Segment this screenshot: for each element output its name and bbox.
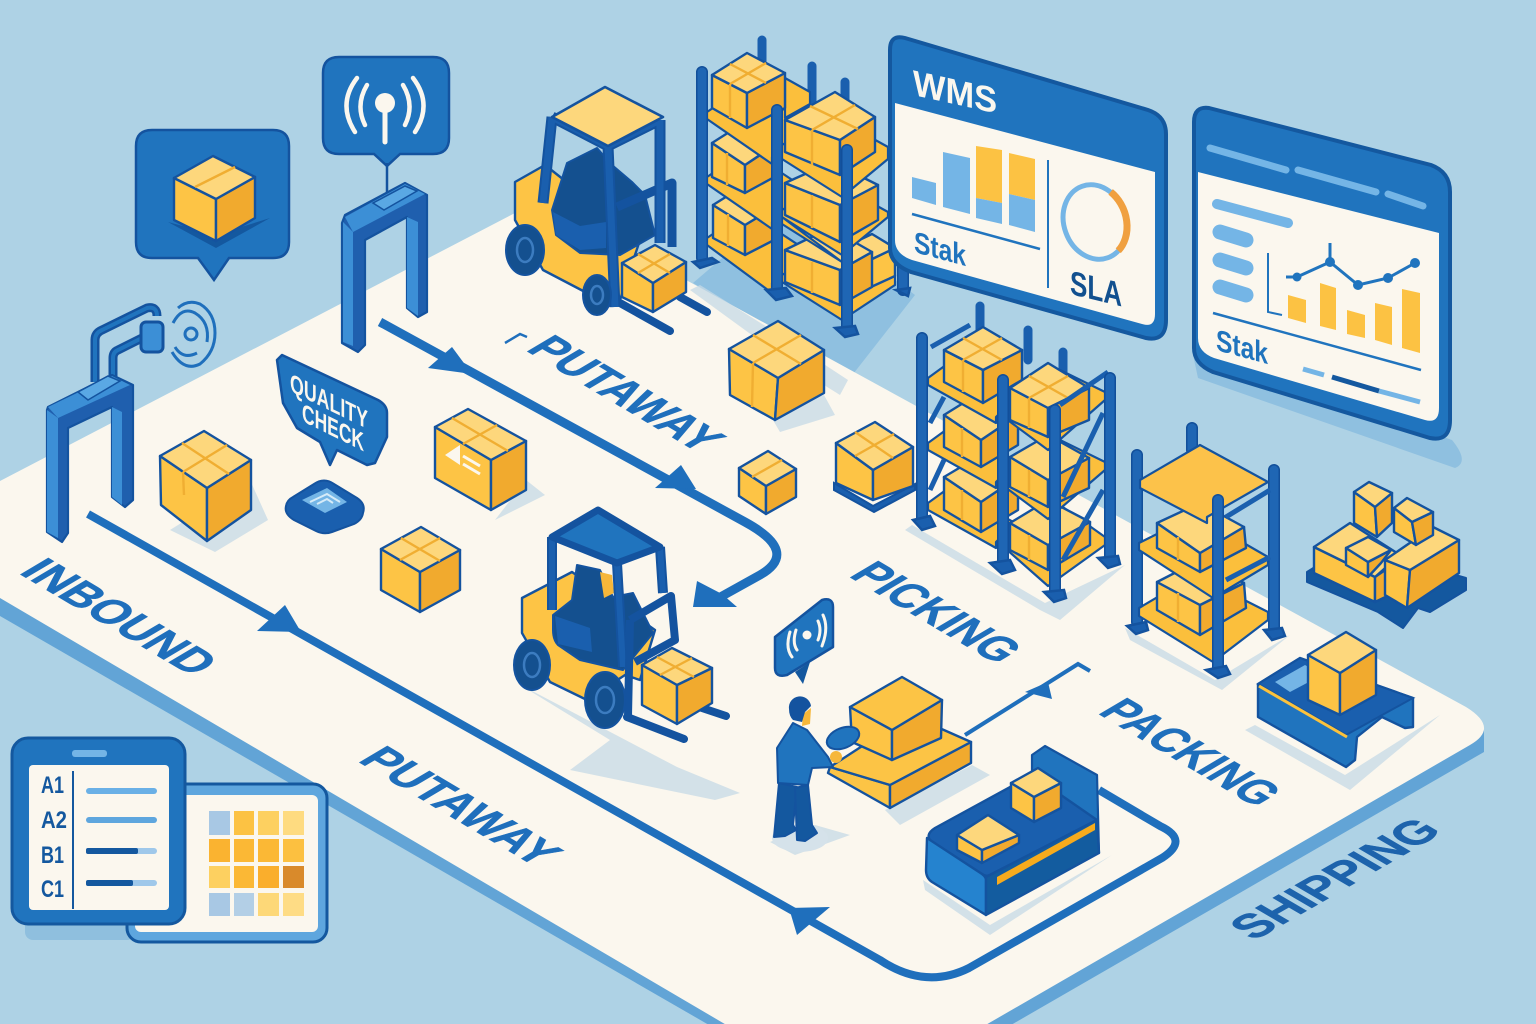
rack B back brace: [930, 325, 970, 490]
rack B mid-left shelf: [928, 427, 1015, 488]
conveyor box 1: [957, 815, 1019, 863]
box rack A4: [785, 92, 875, 175]
route: packing connector: [965, 664, 1090, 735]
stacked parcel: [828, 677, 971, 808]
box: inbound: [160, 431, 251, 541]
Stak label 2: Stak: [1216, 323, 1269, 371]
location label A2: A2: [41, 807, 67, 834]
rack A top-left shelf: [707, 85, 815, 164]
label: PUTAWAY lower: PUTAWAY: [348, 739, 574, 873]
rack shadow on backdrop: [693, 200, 915, 378]
rack A mid-left shelf: [707, 150, 815, 229]
rack B braces: [1060, 372, 1108, 560]
forklift: yellow: [506, 87, 707, 331]
forklift: blue: [514, 510, 726, 739]
gate: RFID arch back: [342, 183, 427, 352]
yellow forklift seat: [552, 148, 655, 255]
box rack B3: [944, 392, 1018, 467]
location label C1: C1: [41, 876, 64, 903]
rack C: [1127, 428, 1285, 678]
conveyor stripe: [997, 823, 1095, 885]
blue forklift body: [522, 572, 655, 700]
pallet stack: [1307, 482, 1466, 628]
rack B top-left shelf: [928, 362, 1015, 423]
scanner: [823, 722, 863, 754]
SLA donut: [1053, 176, 1137, 268]
rack B mid-right shelf: [1005, 440, 1105, 519]
rack C low shelf: [1139, 575, 1268, 662]
quality text: QUALITY: [290, 367, 368, 435]
blue forklift seat: [553, 565, 653, 670]
WMS dashboard: [890, 37, 1166, 339]
callout: RFID signal: [323, 57, 449, 192]
blue forklift load: [642, 648, 712, 724]
route: putaway path: [380, 322, 777, 600]
WMS bars: [912, 146, 1035, 232]
analytics bars: [1288, 283, 1420, 353]
box: labelled arrow: [435, 409, 526, 510]
yellow forklift load: [622, 245, 686, 312]
rack B top-right shelf: [1005, 370, 1105, 450]
hand: [830, 751, 842, 763]
yellow forklift body: [515, 165, 640, 300]
SLA label: SLA: [1070, 264, 1122, 314]
rack C front post: [1127, 500, 1285, 678]
rack C braces: [1226, 490, 1270, 580]
callout: picker scan: [775, 599, 833, 684]
box rack B5: [1010, 435, 1089, 507]
yellow forklift rear wheel: [506, 225, 544, 275]
blue forklift front wheel: [585, 672, 625, 728]
route: inbound to shipping path: [88, 514, 1176, 977]
box rack A1: [712, 53, 785, 128]
box rack A5: [785, 162, 878, 242]
yellow forklift cage: [543, 117, 660, 307]
scanner pad: [286, 480, 364, 533]
worker right leg: [795, 785, 817, 841]
arrow: inbound flow: [257, 605, 301, 632]
label: PACKING: PACKING: [1088, 691, 1294, 813]
arrow: packing connector: [1025, 682, 1052, 699]
heatmap grid: [209, 811, 304, 916]
rack A front posts: [693, 72, 910, 337]
check text: CHECK: [302, 397, 364, 457]
rack B back posts: [980, 306, 1063, 372]
blue forklift hand area: [600, 572, 614, 598]
blue forklift seat cushion: [555, 616, 592, 652]
stack large right box: [1385, 527, 1459, 608]
pallet: [1307, 545, 1466, 628]
box rack A7: [853, 234, 895, 287]
inventory heatmap panel: [25, 784, 327, 942]
arrow: shipping flow: [789, 907, 830, 935]
dashboard shadow: [1192, 350, 1462, 468]
rack B low-left shelf: [928, 487, 1015, 548]
box rack B6: [1010, 500, 1090, 570]
box: large: [729, 321, 824, 420]
rack A mid-right shelf: [782, 180, 888, 262]
rack A: [693, 40, 910, 337]
worker left leg: [774, 783, 797, 837]
icon: scan waves: [172, 302, 215, 366]
label: PUTAWAY upper: PUTAWAY: [516, 328, 737, 459]
floor edge band: [0, 598, 1484, 1024]
box rack C upper: [1157, 503, 1246, 572]
Stak label: Stak: [914, 225, 967, 273]
box rack A2: [712, 122, 778, 193]
dock platform: [1258, 632, 1413, 767]
side pills short: [1220, 232, 1246, 295]
blue forklift cage: [552, 537, 663, 667]
warehouse floor: [0, 200, 1484, 1024]
blue forklift roof: [552, 510, 660, 563]
rack A upper shelf far: [785, 78, 810, 118]
worker: [772, 696, 863, 852]
box rack C lower: [1157, 560, 1246, 635]
box: small: [739, 451, 796, 514]
yellow forklift front wheel: [583, 275, 611, 315]
rack C back posts: [1137, 428, 1274, 628]
analytics dashboard: [1194, 108, 1450, 439]
arrow: putaway flow 2: [655, 465, 696, 489]
parcel top box: [850, 677, 942, 760]
box rack B1: [944, 327, 1022, 403]
side pills: [1217, 204, 1288, 223]
rack B low-right shelf: [1005, 505, 1105, 586]
conveyor: [926, 746, 1099, 915]
rack A lower-right shelf: [782, 245, 895, 320]
yellow forklift roof: [552, 87, 663, 146]
yellow forklift seat cushion: [553, 212, 606, 250]
dock box: [1308, 632, 1376, 715]
box: floor: [381, 527, 460, 612]
worker head: [789, 696, 811, 722]
box rack A3: [713, 185, 778, 255]
blue forklift rear wheel: [514, 640, 550, 690]
stack tall box: [1354, 482, 1392, 537]
worker face: [802, 708, 811, 726]
location label B1: B1: [41, 842, 64, 869]
stack large left box: [1314, 523, 1400, 602]
box rack B2: [1010, 363, 1089, 437]
callout: quality check: [277, 355, 387, 465]
arrow: putaway flow 1: [428, 347, 472, 374]
rack A back posts: [762, 40, 845, 110]
rack C mid shelf: [1139, 515, 1268, 598]
rack C top shelf: [1140, 445, 1268, 523]
analytics line: [1286, 243, 1420, 290]
location bars: [86, 788, 157, 886]
floor shadows: [170, 285, 1440, 935]
stack front small box: [1346, 537, 1391, 577]
location tablet: [12, 738, 185, 924]
header pills: [1210, 148, 1423, 206]
rack A lower-left shelf: [707, 211, 815, 293]
putaway tick: [505, 334, 527, 343]
box rack B4: [944, 455, 1018, 532]
gate: RFID arch front: [47, 308, 163, 542]
blue forklift mast: [628, 596, 675, 716]
box rack A6: [785, 228, 872, 305]
label: PICKING: PICKING: [839, 554, 1035, 670]
worker torso: [777, 723, 833, 785]
conveyor box 2: [1011, 768, 1061, 822]
label: SHIPPING: SHIPPING: [1217, 810, 1452, 946]
rack B: [913, 306, 1120, 602]
yellow forklift forks: [620, 297, 707, 331]
rack A top-right shelf: [782, 115, 888, 197]
arrow: putaway end: [693, 581, 737, 607]
rack B front posts: [913, 338, 1120, 602]
label: INBOUND: INBOUND: [9, 551, 230, 682]
callout: package: [136, 130, 289, 280]
location label A1: A1: [41, 772, 64, 799]
progress bars: [1303, 369, 1324, 375]
parcel base: [828, 715, 971, 808]
stack small box: [1394, 498, 1433, 545]
WMS title: WMS: [913, 62, 997, 121]
yellow forklift mast: [617, 183, 672, 247]
blue forklift forks: [627, 704, 726, 739]
box on small pallet: [834, 422, 915, 512]
